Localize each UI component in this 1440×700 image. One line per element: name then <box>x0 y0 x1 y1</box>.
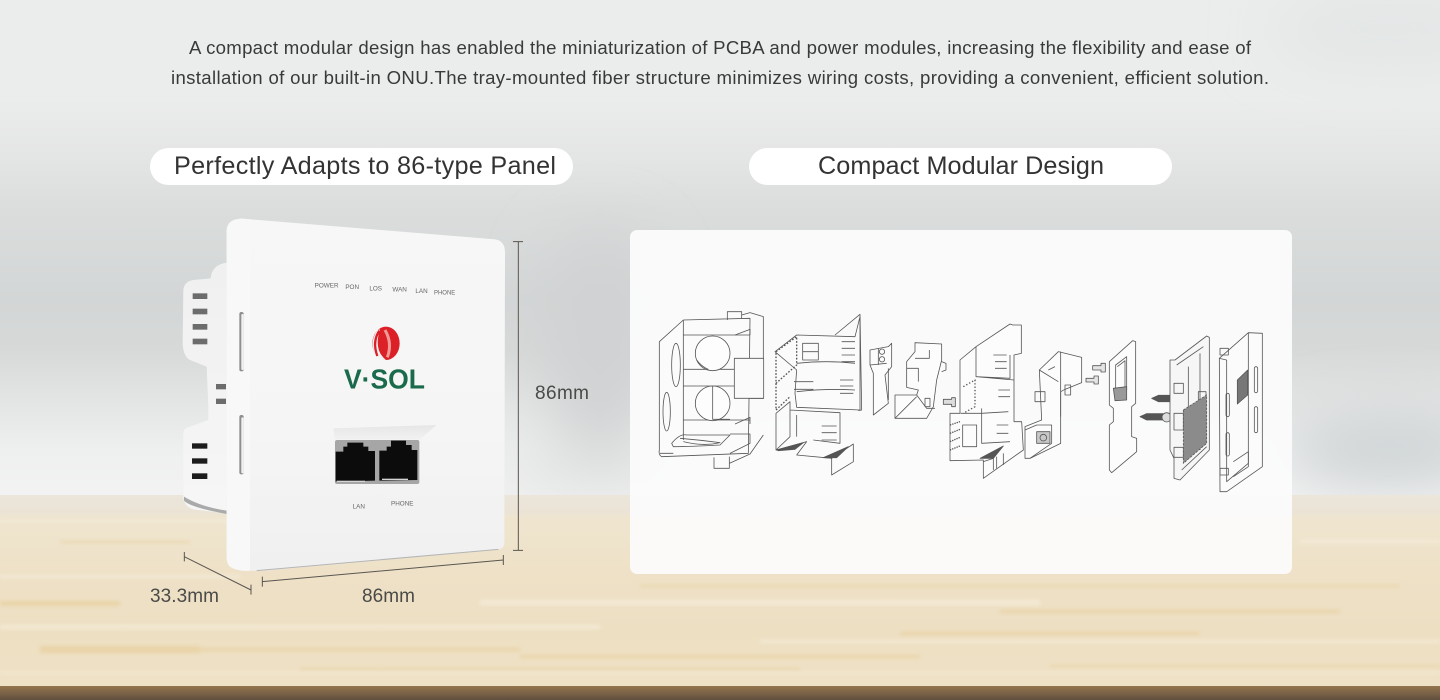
side slots <box>239 312 244 474</box>
LED labels: LOS <box>369 285 382 292</box>
intro paragraph: A compact modular design has enabled the miniaturization of PCBA and power modules, increasing the flexibility and ease of <box>189 37 1252 58</box>
long screws <box>1140 393 1180 422</box>
mounting plate <box>1109 341 1137 473</box>
V-SOL logo <box>344 327 425 394</box>
bracket module <box>895 343 946 418</box>
heading pill: Perfectly Adapts to 86-type Panel <box>150 148 573 185</box>
LED labels: PHONE <box>434 290 455 296</box>
dimension label: depth: 33.3mm <box>150 586 219 607</box>
front cover <box>1219 333 1262 492</box>
fiber tray module <box>1025 352 1082 458</box>
front panel <box>227 219 505 571</box>
panel: exploded view <box>630 230 1292 574</box>
power module <box>775 314 862 475</box>
exploded drawing: left components <box>659 312 955 475</box>
port labels <box>353 501 414 511</box>
device: wall-mounted ONU <box>183 219 523 595</box>
dimension lines <box>184 242 523 595</box>
background: grey wall <box>0 0 1440 500</box>
small screw <box>943 398 955 407</box>
main module <box>950 324 1023 478</box>
V-SOL logo: V·SOL <box>344 363 425 394</box>
LED labels: POWER <box>315 282 339 289</box>
rear housing <box>183 263 227 514</box>
circuit board <box>1170 336 1209 480</box>
heading pill: Compact Modular Design <box>749 148 1172 185</box>
LED labels: WAN <box>392 287 407 294</box>
LED labels: LAN <box>415 288 428 295</box>
small screws <box>1086 363 1105 384</box>
intro paragraph <box>171 37 1269 88</box>
heading pill: Compact Modular Design: Compact Modular Design <box>818 152 1104 180</box>
LED labels <box>315 282 455 296</box>
port labels: LAN <box>353 504 365 511</box>
ethernet port recess <box>333 425 437 439</box>
port labels: PHONE <box>391 501 414 508</box>
exploded drawing: right components <box>950 324 1262 492</box>
LED labels: PON <box>345 284 359 291</box>
intro paragraph: installation of our built-in ONU.The tray-mounted fiber structure minimizes wiring costs, providing a convenient, efficient solution. <box>171 67 1269 88</box>
dimension label: height: 86mm <box>535 383 589 404</box>
background: wooden table <box>0 495 1440 700</box>
ethernet ports <box>335 440 419 484</box>
terminal block <box>870 343 892 415</box>
back box <box>659 312 764 468</box>
heading pill: Perfectly Adapts to 86-type Panel: Perfectly Adapts to 86-type Panel <box>174 152 556 180</box>
dimension label: width: 86mm <box>362 586 415 607</box>
